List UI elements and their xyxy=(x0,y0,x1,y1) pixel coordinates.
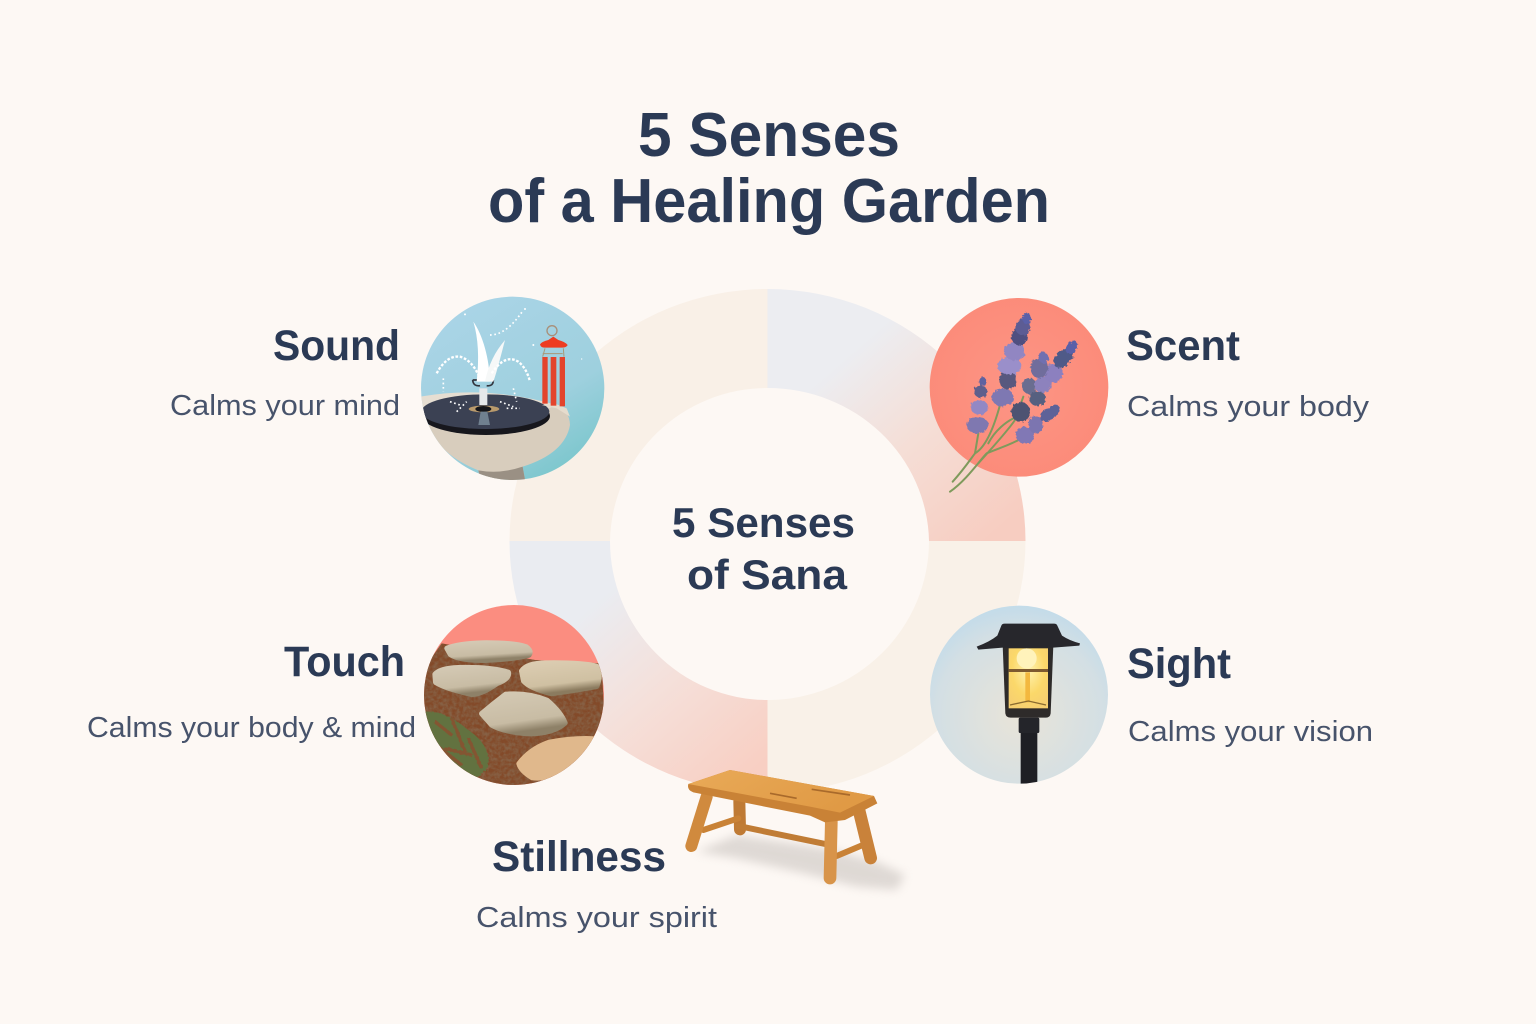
title xyxy=(488,101,1050,236)
icon: fountain and wind chime xyxy=(421,296,604,480)
label: sound: Sound xyxy=(273,322,400,370)
label: touch: Calms your body & mind xyxy=(87,712,416,744)
icon: garden lantern xyxy=(930,606,1108,784)
label: stillness: Stillness xyxy=(492,833,666,881)
title: of a Healing Garden xyxy=(488,167,1050,236)
icon: lavender xyxy=(930,298,1108,492)
label: sight xyxy=(1127,640,1373,748)
label: touch: Touch xyxy=(284,638,405,686)
label: scent: Calms your body xyxy=(1127,391,1370,423)
label: sound xyxy=(170,322,400,422)
label: stillness xyxy=(476,833,717,934)
center label: 5 Senses xyxy=(672,499,855,546)
icon: stepping stones xyxy=(424,605,604,785)
label: sight: Sight xyxy=(1127,640,1231,688)
center label: of Sana xyxy=(687,551,848,598)
label: scent: Scent xyxy=(1126,322,1240,370)
label: sound: Calms your mind xyxy=(170,390,400,422)
label: scent xyxy=(1126,322,1370,423)
label: touch xyxy=(87,638,416,744)
label: stillness: Calms your spirit xyxy=(476,902,717,934)
label: sight: Calms your vision xyxy=(1128,716,1373,748)
title: 5 Senses xyxy=(638,101,900,170)
ring chart: four quadrants xyxy=(510,289,1026,793)
icon: wooden bench xyxy=(688,770,905,890)
center label xyxy=(672,499,855,598)
